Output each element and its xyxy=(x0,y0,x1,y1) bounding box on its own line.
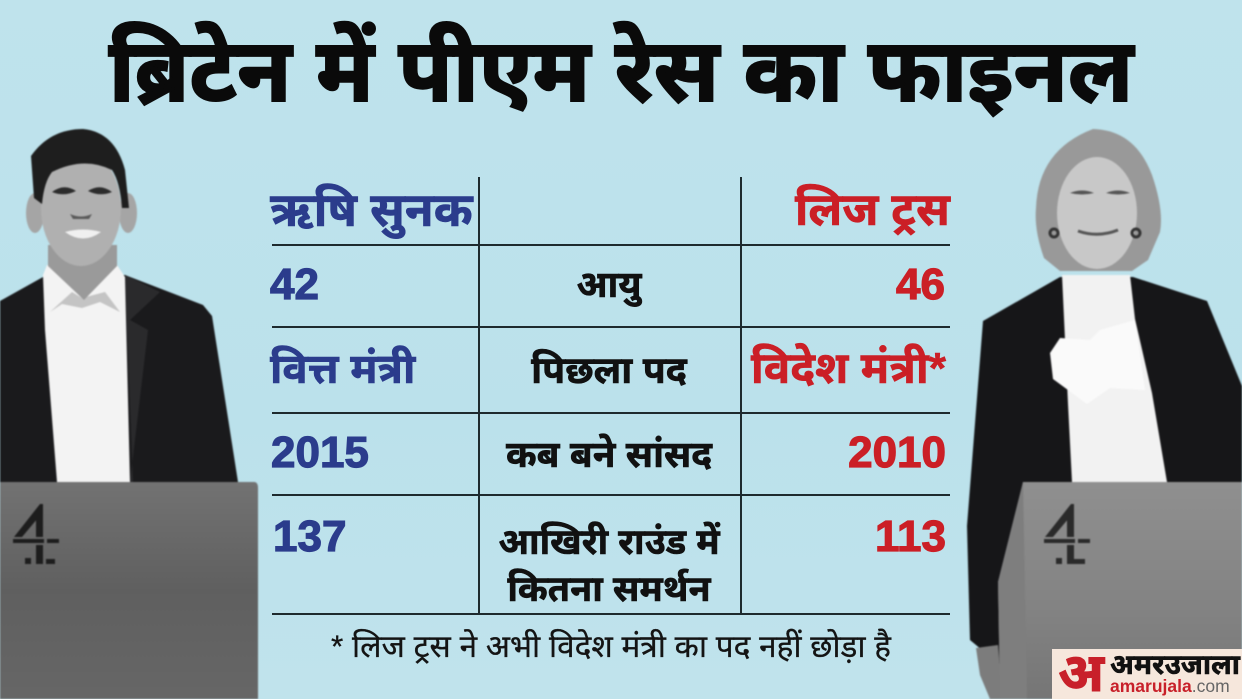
header: Liz Truss: लिज ट्रस xyxy=(795,183,950,235)
row: became MP xyxy=(271,428,946,477)
earrings xyxy=(1050,229,1140,237)
podium xyxy=(998,482,1242,699)
logo: Amar Ujala: amarujala.com xyxy=(1110,676,1230,696)
podium xyxy=(0,482,258,699)
title: ब्रिटेन में पीएम रेस का फाइनल xyxy=(109,21,1133,120)
row: last round support: आखिरी राउंड में xyxy=(498,521,720,562)
channel 4 logo xyxy=(1044,504,1090,564)
row: previous post: विदेश मंत्री* xyxy=(751,344,946,393)
hair xyxy=(31,129,129,208)
row: became MP: कब बने सांसद xyxy=(506,434,712,475)
row: previous post xyxy=(270,342,946,393)
shirt xyxy=(43,265,130,482)
face xyxy=(1057,157,1137,269)
row: became MP: 2010 xyxy=(848,428,946,477)
header: Rishi Sunak: ऋषि सुनक xyxy=(270,183,473,236)
photo: Rishi Sunak at podium xyxy=(0,128,259,699)
logo: Amar Ujala: अमरउजाला xyxy=(1110,649,1240,680)
photo: Liz Truss at podium xyxy=(966,128,1242,699)
hair xyxy=(1036,129,1161,271)
blouse xyxy=(1062,275,1167,482)
jacket xyxy=(967,277,1242,665)
logo: Amar Ujala xyxy=(1052,649,1242,699)
hand xyxy=(976,645,1002,699)
neck xyxy=(48,245,117,300)
table grid xyxy=(272,177,950,615)
face xyxy=(41,150,121,266)
channel 4 logo xyxy=(13,504,59,564)
jacket xyxy=(0,275,238,482)
row: age: आयु xyxy=(576,264,642,305)
row: last round support: कितना समर्थन xyxy=(507,568,711,609)
ears xyxy=(26,193,137,233)
row: previous post: पिछला पद xyxy=(531,349,687,391)
row: previous post: वित्त मंत्री xyxy=(270,345,415,392)
row: age: 46 xyxy=(896,260,945,309)
footnote: * लिज ट्रस ने अभी विदेश मंत्री का पद नहीं छोड़ा है xyxy=(331,628,891,664)
bow xyxy=(1050,320,1145,404)
row: age: 42 xyxy=(270,260,319,309)
row: last round support: 113 xyxy=(875,512,946,561)
row: age xyxy=(270,260,945,309)
row: last round support: 137 xyxy=(273,512,346,561)
row: last round support xyxy=(273,512,946,609)
row: became MP: 2015 xyxy=(271,428,369,477)
